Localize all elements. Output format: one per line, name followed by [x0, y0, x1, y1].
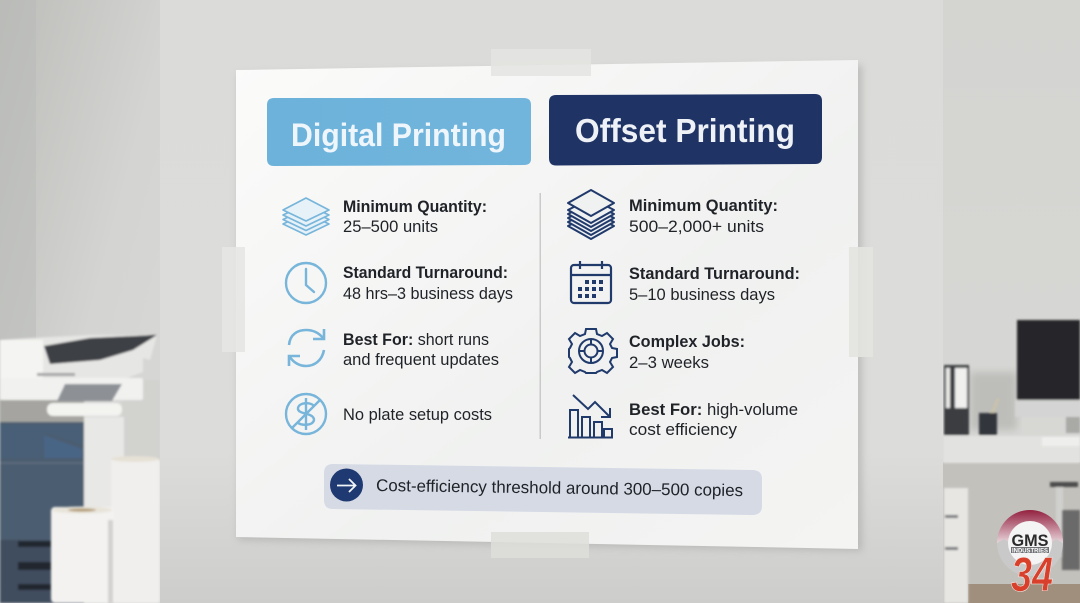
central wall [160, 0, 943, 603]
text: standard turnaround: 48 hrs–3 business days [343, 284, 513, 303]
right office background [943, 0, 1080, 603]
text: minimum quantity [629, 196, 778, 236]
text: minimum quantity [343, 197, 487, 236]
tape: right [849, 247, 873, 357]
printer [0, 335, 160, 603]
column divider [540, 193, 541, 439]
text: best for short runs: Best For: short runs [343, 330, 489, 349]
logo: gms industries 34: INDUSTRIES [1012, 548, 1048, 554]
text: complex jobs [629, 332, 745, 372]
text: minimum quantity: Minimum Quantity: [343, 197, 487, 216]
icon: gear [569, 329, 617, 373]
text: complex jobs: Complex Jobs: [629, 332, 745, 351]
text: standard turnaround: 5–10 business days [629, 285, 775, 304]
text: no plate setup costs: No plate setup costs [343, 405, 492, 424]
icon: thick paper stack [568, 190, 614, 239]
tape: bottom [491, 532, 589, 558]
text: standard turnaround: Standard Turnaround: [343, 263, 508, 282]
text: standard turnaround [629, 264, 800, 304]
icon: arrow circle [330, 468, 363, 502]
heading: digital printing [267, 98, 531, 166]
tape: left [222, 247, 245, 352]
icon: paper stack [283, 198, 329, 235]
tape: top [491, 49, 591, 76]
panel: offset printing [549, 94, 822, 439]
callout: cost-efficiency threshold [324, 464, 762, 515]
poster panel [236, 60, 858, 549]
text: best for high-volume: cost efficiency [629, 420, 737, 439]
text: standard turnaround [343, 263, 513, 303]
icon: clock [286, 263, 326, 303]
text: threshold: Cost-efficiency threshold around 300–500 copies [376, 476, 743, 500]
left office background [0, 0, 160, 603]
heading: offset printing [549, 94, 822, 166]
icon: refresh arrows [289, 329, 324, 366]
text: minimum quantity: 500–2,000+ units [629, 217, 764, 236]
logo: gms industries 34: 34 [1011, 549, 1053, 602]
paper rolls [51, 456, 160, 603]
text: minimum quantity: Minimum Quantity: [629, 196, 778, 215]
logo: gms industries 34: GMS [1012, 531, 1048, 550]
text: best for short runs: and frequent updates [343, 350, 499, 369]
icon: calendar [571, 261, 611, 303]
heading: digital printing: Digital Printing [291, 117, 506, 153]
poster shadow [238, 65, 862, 551]
text: minimum quantity: 25–500 units [343, 217, 438, 236]
icon: no dollar sign [286, 394, 326, 434]
panel: digital printing [267, 98, 531, 434]
heading: offset printing: Offset Printing [575, 112, 795, 149]
text: best for short runs [343, 330, 499, 369]
text: best for high-volume [629, 400, 798, 439]
icon: falling bar chart [568, 395, 613, 438]
text: complex jobs: 2–3 weeks [629, 353, 709, 372]
text: best for high-volume: Best For: high-volume [629, 400, 798, 419]
logo: gms industries 34 [997, 510, 1063, 602]
text: standard turnaround: Standard Turnaround: [629, 264, 800, 283]
